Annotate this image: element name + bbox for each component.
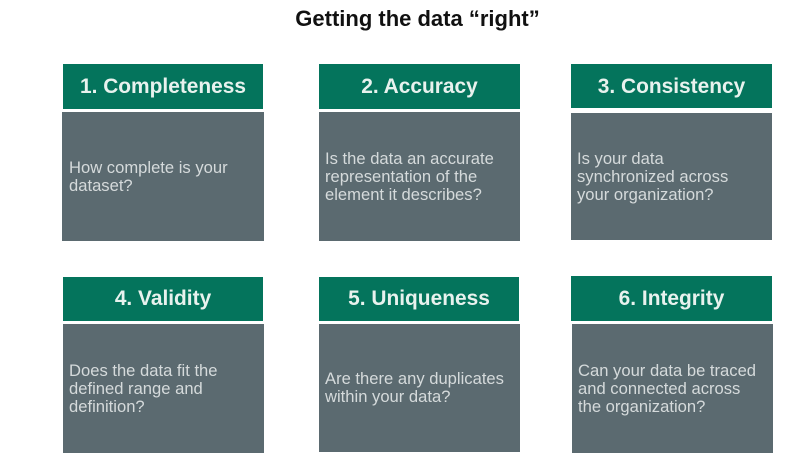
heading: consistency: 3. Consistency xyxy=(598,75,745,98)
panel: consistency xyxy=(571,64,772,240)
body: accuracy: element it describes? xyxy=(325,185,482,204)
body: completeness xyxy=(62,112,264,241)
body: integrity: and connected across xyxy=(578,379,740,398)
heading: uniqueness: 5. Uniqueness xyxy=(348,287,490,310)
body: validity: Does the data fit the xyxy=(69,361,218,380)
body: consistency: Is your data xyxy=(577,149,664,168)
panel: validity xyxy=(63,277,264,453)
heading: accuracy: 2. Accuracy xyxy=(361,75,478,98)
heading: completeness: 1. Completeness xyxy=(80,75,246,98)
panel: integrity xyxy=(571,276,773,453)
body: validity: defined range and xyxy=(69,379,203,398)
panel: uniqueness xyxy=(319,277,520,452)
body: integrity xyxy=(572,324,773,453)
body: uniqueness xyxy=(319,324,520,452)
body: completeness: How complete is your xyxy=(69,158,228,177)
heading: validity: 4. Validity xyxy=(115,287,211,310)
heading: validity xyxy=(63,277,263,321)
heading: integrity xyxy=(571,276,772,321)
body: consistency xyxy=(571,113,772,240)
heading: consistency xyxy=(571,64,772,108)
panel: accuracy xyxy=(319,64,520,241)
body: completeness: dataset? xyxy=(69,176,133,195)
heading: integrity: 6. Integrity xyxy=(619,287,724,310)
title: Getting the data “right” xyxy=(295,6,540,31)
body: accuracy xyxy=(319,112,520,241)
heading: uniqueness xyxy=(319,277,519,321)
heading: completeness xyxy=(63,64,263,109)
heading: accuracy xyxy=(319,64,520,109)
body: uniqueness: within your data? xyxy=(325,387,450,406)
body: integrity: Can your data be traced xyxy=(578,361,756,380)
body: accuracy: Is the data an accurate xyxy=(325,149,494,168)
body: accuracy: representation of the xyxy=(325,167,477,186)
body: integrity: the organization? xyxy=(578,397,705,416)
panel: completeness xyxy=(62,64,264,241)
body: validity xyxy=(63,324,264,453)
body: consistency: synchronized across xyxy=(577,167,728,186)
body: consistency: your organization? xyxy=(577,185,714,204)
body: uniqueness: Are there any duplicates xyxy=(325,369,504,388)
body: validity: definition? xyxy=(69,397,145,416)
